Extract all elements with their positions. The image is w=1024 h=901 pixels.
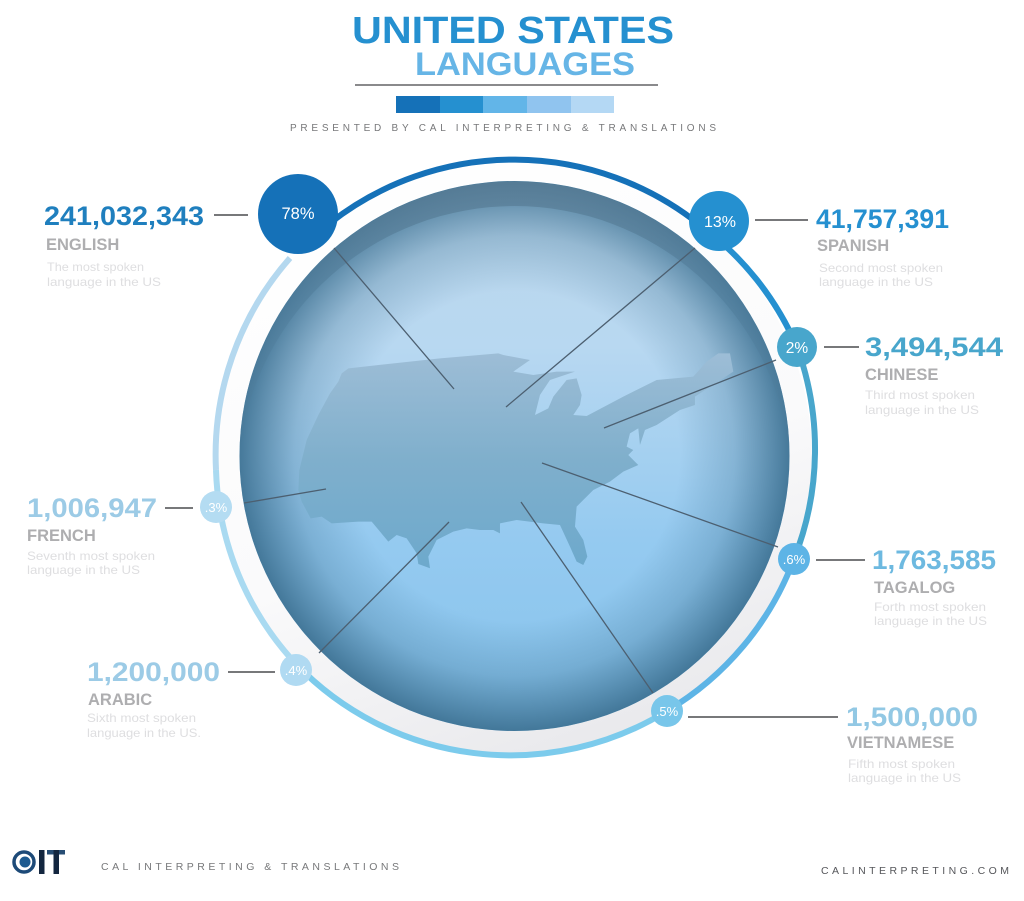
callout: Arabic: Sixth most spoken xyxy=(87,711,196,725)
top crescent shade xyxy=(240,181,789,449)
callout: Spanish: Second most spoken xyxy=(819,261,943,275)
callout: Chinese: Third most spoken xyxy=(865,388,975,402)
arc: French xyxy=(216,258,290,470)
footer: website: CALINTERPRETING.COM xyxy=(821,865,1009,877)
callout: French: FRENCH xyxy=(27,527,96,545)
footer: company name: CAL INTERPRETING & TRANSLATIONS xyxy=(101,861,399,873)
arc: Arabic xyxy=(216,470,296,664)
callout: Arabic: ARABIC xyxy=(88,691,152,709)
callout: English: The most spoken xyxy=(47,260,144,274)
callout: Chinese: 2% xyxy=(786,340,808,357)
callout: Vietnamese: .5% xyxy=(656,704,679,719)
callout: Tagalog: .6% xyxy=(783,552,806,567)
callout: Vietnamese: 1,500,000 xyxy=(846,702,978,732)
callout: French: Seventh most spoken xyxy=(27,549,155,563)
callout: Vietnamese: VIETNAMESE xyxy=(847,734,954,752)
white bevel xyxy=(216,160,812,756)
callout: Arabic: 1,200,000 xyxy=(87,657,220,687)
title xyxy=(352,10,674,82)
callout: Spanish: 13% xyxy=(704,214,736,231)
callout: Spanish: language in the US xyxy=(819,275,933,289)
arc: Spanish xyxy=(700,225,797,347)
globe ring xyxy=(216,160,815,756)
callout: Chinese: language in the US xyxy=(865,403,979,417)
callout: Tagalog xyxy=(778,543,996,628)
callout: Tagalog: Forth most spoken xyxy=(874,600,986,614)
callout: Arabic xyxy=(87,654,312,740)
callout: Chinese: 3,494,544 xyxy=(865,332,1003,362)
callout: Chinese: CHINESE xyxy=(865,366,938,384)
callout: English xyxy=(44,174,338,289)
callout: Tagalog: TAGALOG xyxy=(874,579,955,597)
callout: English: language in the US xyxy=(47,275,161,289)
callout: Vietnamese: language in the US xyxy=(848,771,961,785)
colour bar xyxy=(396,96,614,113)
callout: Spanish xyxy=(689,191,949,289)
callout: Vietnamese: Fifth most spoken xyxy=(848,757,955,771)
subtitle: PRESENTED BY CAL INTERPRETING & TRANSLATIONS xyxy=(290,123,716,134)
title: UNITED STATES xyxy=(352,10,674,52)
callout: French: 1,006,947 xyxy=(27,493,157,523)
arc: Chinese xyxy=(794,347,815,559)
arc: Tagalog xyxy=(667,559,794,711)
leader lines xyxy=(244,248,778,693)
globe xyxy=(240,181,790,731)
callout: French xyxy=(27,491,232,577)
callout: French: language in the US xyxy=(27,563,140,577)
callout: Tagalog: 1,763,585 xyxy=(872,545,996,575)
callout: French: .3% xyxy=(205,500,228,515)
callout: Tagalog: language in the US xyxy=(874,614,987,628)
map of the United States xyxy=(298,353,733,568)
logo xyxy=(14,850,65,874)
callout: Vietnamese xyxy=(651,695,978,785)
callout: Spanish: SPANISH xyxy=(817,237,889,255)
callout: Spanish: 41,757,391 xyxy=(816,204,949,234)
arc: English xyxy=(330,160,700,225)
callout: Arabic: .4% xyxy=(285,663,308,678)
callout: Arabic: language in the US. xyxy=(87,726,201,740)
arc: Vietnamese xyxy=(296,664,667,755)
callout: Chinese xyxy=(777,327,1003,417)
title: LANGUAGES xyxy=(415,46,635,82)
callout: English: 78% xyxy=(281,205,315,223)
callout: English: 241,032,343 xyxy=(44,201,204,231)
callout: English: ENGLISH xyxy=(46,236,119,254)
